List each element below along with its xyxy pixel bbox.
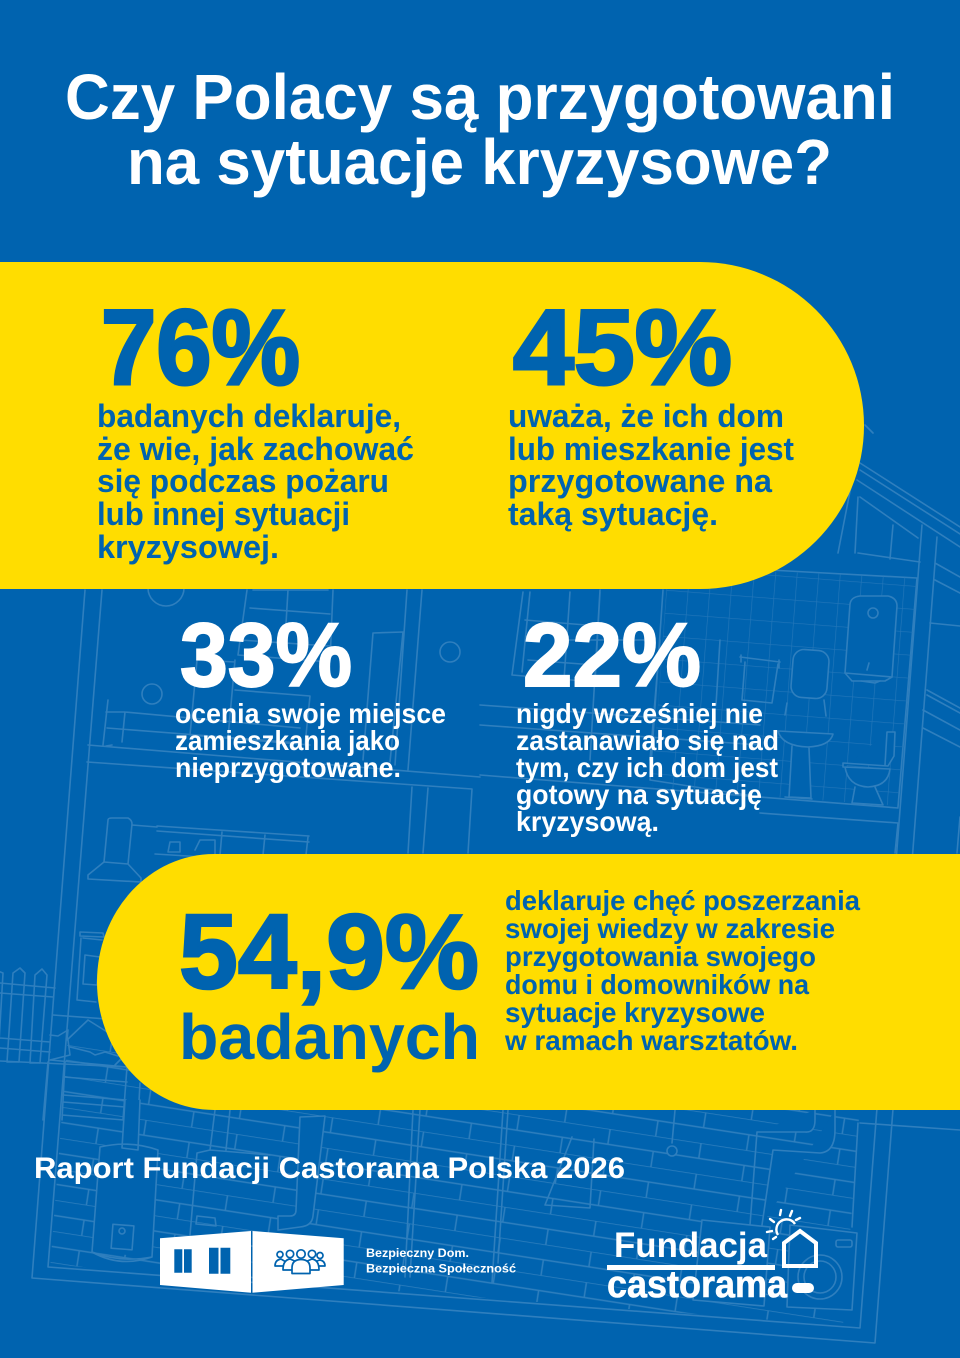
basement pipes and boiler bbox=[92, 1100, 158, 1261]
workshops description bbox=[504, 885, 860, 1056]
upper floor beams bbox=[87, 562, 917, 853]
panel: bottom yellow stat bbox=[97, 854, 960, 1110]
workshops description: domu i domowników na bbox=[505, 969, 809, 1000]
stat 22%: gotowy na sytuację bbox=[516, 779, 762, 810]
stat 54,9% badanych: 54,9% bbox=[179, 893, 479, 1011]
logo: Bezpieczny Dom bbox=[160, 1231, 516, 1293]
house blueprint background bbox=[0, 425, 960, 1343]
wordmark: Fundacja bbox=[614, 1226, 768, 1265]
stat 76%: kryzysowej. bbox=[97, 529, 279, 565]
stat 33%: zamieszkania jako bbox=[175, 725, 400, 756]
stat 33%: 33% bbox=[180, 606, 352, 706]
stat 33%: ocenia swoje miejsce bbox=[175, 698, 446, 729]
stat 45%: przygotowane na bbox=[508, 463, 772, 499]
stat 45%: taką sytuację. bbox=[508, 496, 718, 532]
garden stones bbox=[50, 1015, 127, 1067]
washing machines bbox=[693, 1220, 770, 1306]
bathroom window and doors bbox=[512, 590, 720, 760]
stat 76%: lub innej sytuacji bbox=[97, 496, 350, 532]
workshops description: sytuacje kryzysowe bbox=[505, 997, 765, 1028]
logo: Fundacja Castorama bbox=[607, 1210, 816, 1306]
stat 45% bbox=[508, 287, 794, 532]
wordmark bbox=[607, 1226, 814, 1306]
stat 22%: nigdy wcześniej nie bbox=[516, 698, 763, 729]
stat 76%: się podczas pożaru bbox=[97, 463, 389, 499]
stairs bbox=[43, 1062, 140, 1120]
stat 45%: lub mieszkanie jest bbox=[508, 431, 794, 467]
tiles bbox=[652, 567, 917, 806]
stat 33% bbox=[175, 606, 446, 783]
logo text: Bezpieczny Dom. bbox=[366, 1246, 469, 1260]
title: Czy Polacy są przygotowani bbox=[65, 61, 895, 133]
towel rail bbox=[740, 655, 780, 703]
stat 22%: 22% bbox=[523, 606, 701, 706]
wordmark: castorama bbox=[607, 1264, 788, 1306]
stat 45%: uważa, że ich dom bbox=[508, 398, 784, 434]
stat 22%: kryzysową. bbox=[516, 806, 659, 837]
stat 76%: badanych deklaruje, bbox=[97, 398, 401, 434]
logo text: Bezpieczna Społeczność bbox=[366, 1262, 516, 1276]
logo text bbox=[366, 1246, 516, 1276]
kitchen hood and shelves bbox=[88, 818, 309, 882]
stat 22%: tym, czy ich dom jest bbox=[516, 752, 778, 783]
stat 76% bbox=[97, 287, 414, 565]
workshops description: w ramach warsztatów. bbox=[504, 1025, 798, 1056]
fence bbox=[0, 968, 55, 1063]
panel: top yellow stats bbox=[0, 262, 864, 589]
water heater bbox=[845, 596, 897, 681]
stat 45%: 45% bbox=[513, 287, 732, 407]
stat 22% bbox=[516, 606, 779, 837]
stat 76%: że wie, jak zachować bbox=[97, 431, 414, 467]
mirror bbox=[790, 649, 830, 699]
title bbox=[65, 61, 895, 198]
icon: house with sun bbox=[767, 1210, 816, 1266]
stove bbox=[77, 932, 104, 1002]
stat 22%: zastanawiało się nad bbox=[516, 725, 779, 756]
toilet bbox=[843, 732, 895, 805]
wall clock and round details bbox=[142, 570, 460, 704]
basement brick wall bbox=[50, 1040, 860, 1326]
window top centre bbox=[238, 590, 333, 662]
report source line: Raport Fundacji Castorama Polska 2026 bbox=[34, 1152, 625, 1185]
icon: group of people bbox=[275, 1250, 325, 1274]
title: na sytuacje kryzysowe? bbox=[127, 126, 832, 198]
sink bbox=[778, 700, 833, 799]
workshops description: deklaruje chęć poszerzania bbox=[505, 885, 860, 916]
workshops description: przygotowania swojego bbox=[505, 941, 816, 972]
stat 76%: 76% bbox=[101, 287, 300, 407]
stat 54,9% badanych bbox=[179, 893, 480, 1073]
workshops description: swojej wiedzy w zakresie bbox=[505, 913, 835, 944]
bed bbox=[103, 660, 310, 746]
outer walls and floors bbox=[0, 425, 960, 1343]
icon: open house box bbox=[160, 1231, 344, 1293]
stat 33%: nieprzygotowane. bbox=[175, 752, 401, 783]
stat 54,9% badanych: badanych bbox=[179, 1001, 480, 1073]
